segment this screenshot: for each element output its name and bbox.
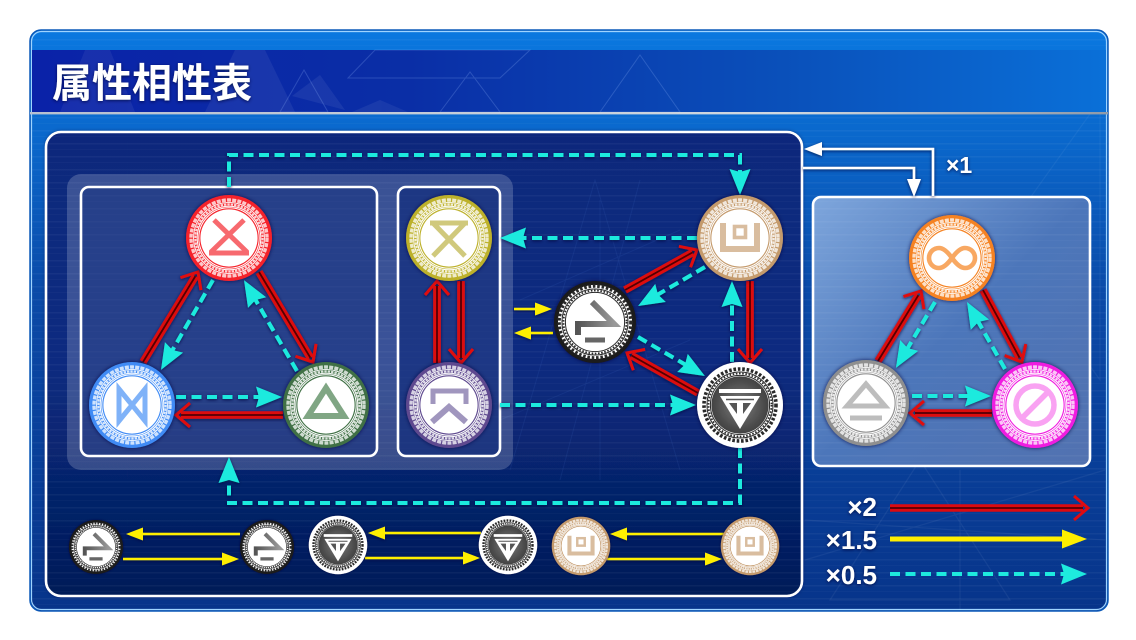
icon: small white medallion left — [309, 516, 367, 574]
arrow: red to green double — [259, 272, 310, 358]
panel: triangle group box — [81, 187, 377, 456]
arrow: black to tan double — [625, 252, 693, 290]
arrow: tan to white double — [746, 281, 754, 358]
legend: x1.5 label: ×1.5 — [826, 525, 877, 555]
arrow: main to right group white — [803, 168, 914, 193]
arrows: right triangle — [878, 290, 1020, 413]
arrow: orange to magenta double — [983, 290, 1020, 358]
arrow: tan to black half — [645, 267, 705, 302]
icon: green medallion — [283, 362, 369, 448]
arrow: black to group yellow — [519, 332, 553, 334]
arrow: white pair upper — [373, 532, 481, 534]
arrow: green to blue double — [181, 411, 283, 419]
legend: dashed cyan arrow — [890, 572, 1079, 576]
arrow: orange to gray half — [900, 302, 935, 361]
arrows: small same-type pairs — [123, 533, 724, 559]
icon: small black medallion left — [69, 520, 123, 574]
arrow: black pair upper — [131, 533, 240, 535]
arrow: black pair lower — [123, 558, 234, 560]
icon: orange medallion — [909, 215, 995, 301]
arrow: gray to orange double — [878, 295, 918, 361]
arrow: magenta to orange half — [971, 309, 1005, 369]
arrow: yellow to purple double — [457, 281, 465, 358]
icon: white medallion — [697, 362, 783, 448]
arrow: dashed bottom route from white to group — [229, 448, 740, 503]
legend: double red arrow — [890, 504, 1083, 512]
icon: small white medallion right — [479, 516, 537, 574]
panel: pair group box — [398, 187, 500, 456]
arrows: left triangle — [143, 272, 310, 415]
arrow: purple to yellow double — [433, 286, 441, 363]
panel: main chart area — [46, 132, 802, 596]
arrow: group to black yellow — [514, 308, 547, 310]
title: 属性相性表 — [52, 62, 252, 106]
icon: yellow medallion — [406, 195, 492, 281]
icon: small tan medallion left — [552, 517, 610, 575]
arrow: green to red half — [248, 287, 297, 371]
arrow: gray to magenta half — [912, 394, 983, 398]
arrow: right group to main white — [808, 149, 933, 196]
panel: right triangle group — [813, 197, 1090, 466]
legend: yellow arrow — [890, 536, 1081, 542]
arrow: blue to red double — [143, 276, 195, 362]
icon: tan medallion — [697, 195, 783, 281]
arrow: dashed top route to tan — [229, 155, 740, 187]
arrows: yellow purple pair and center network — [437, 238, 750, 405]
panel: lighter group backing — [67, 174, 513, 470]
icon: gray medallion — [823, 360, 909, 446]
arrow: purple to white half — [500, 403, 688, 407]
icon: purple medallion — [406, 362, 492, 448]
header band — [30, 50, 1108, 114]
arrow: magenta to gray double — [915, 409, 992, 417]
arrow: blue to green half — [176, 395, 274, 399]
arrow: tan to yellow half — [508, 236, 697, 240]
arrow: white to black double — [631, 355, 698, 393]
icon: magenta medallion — [992, 362, 1078, 448]
arrow: white pair lower — [365, 557, 475, 559]
legend — [826, 492, 1083, 590]
legend: x0.5 label: ×0.5 — [826, 560, 877, 590]
arrow: white to tan half — [730, 289, 734, 362]
arrow: tan pair upper — [615, 533, 724, 535]
legend: x2 label: ×2 — [847, 492, 877, 522]
label: x1: ×1 — [946, 152, 972, 178]
icon: red medallion — [186, 195, 272, 281]
icon: blue medallion — [89, 362, 175, 448]
arrow: red to blue half — [165, 280, 213, 363]
icon: small black medallion right — [240, 520, 294, 574]
arrow: black to white half — [638, 337, 698, 372]
arrow: tan pair lower — [607, 558, 717, 560]
icon: small tan medallion right — [721, 517, 779, 575]
icon: black medallion — [554, 281, 636, 363]
